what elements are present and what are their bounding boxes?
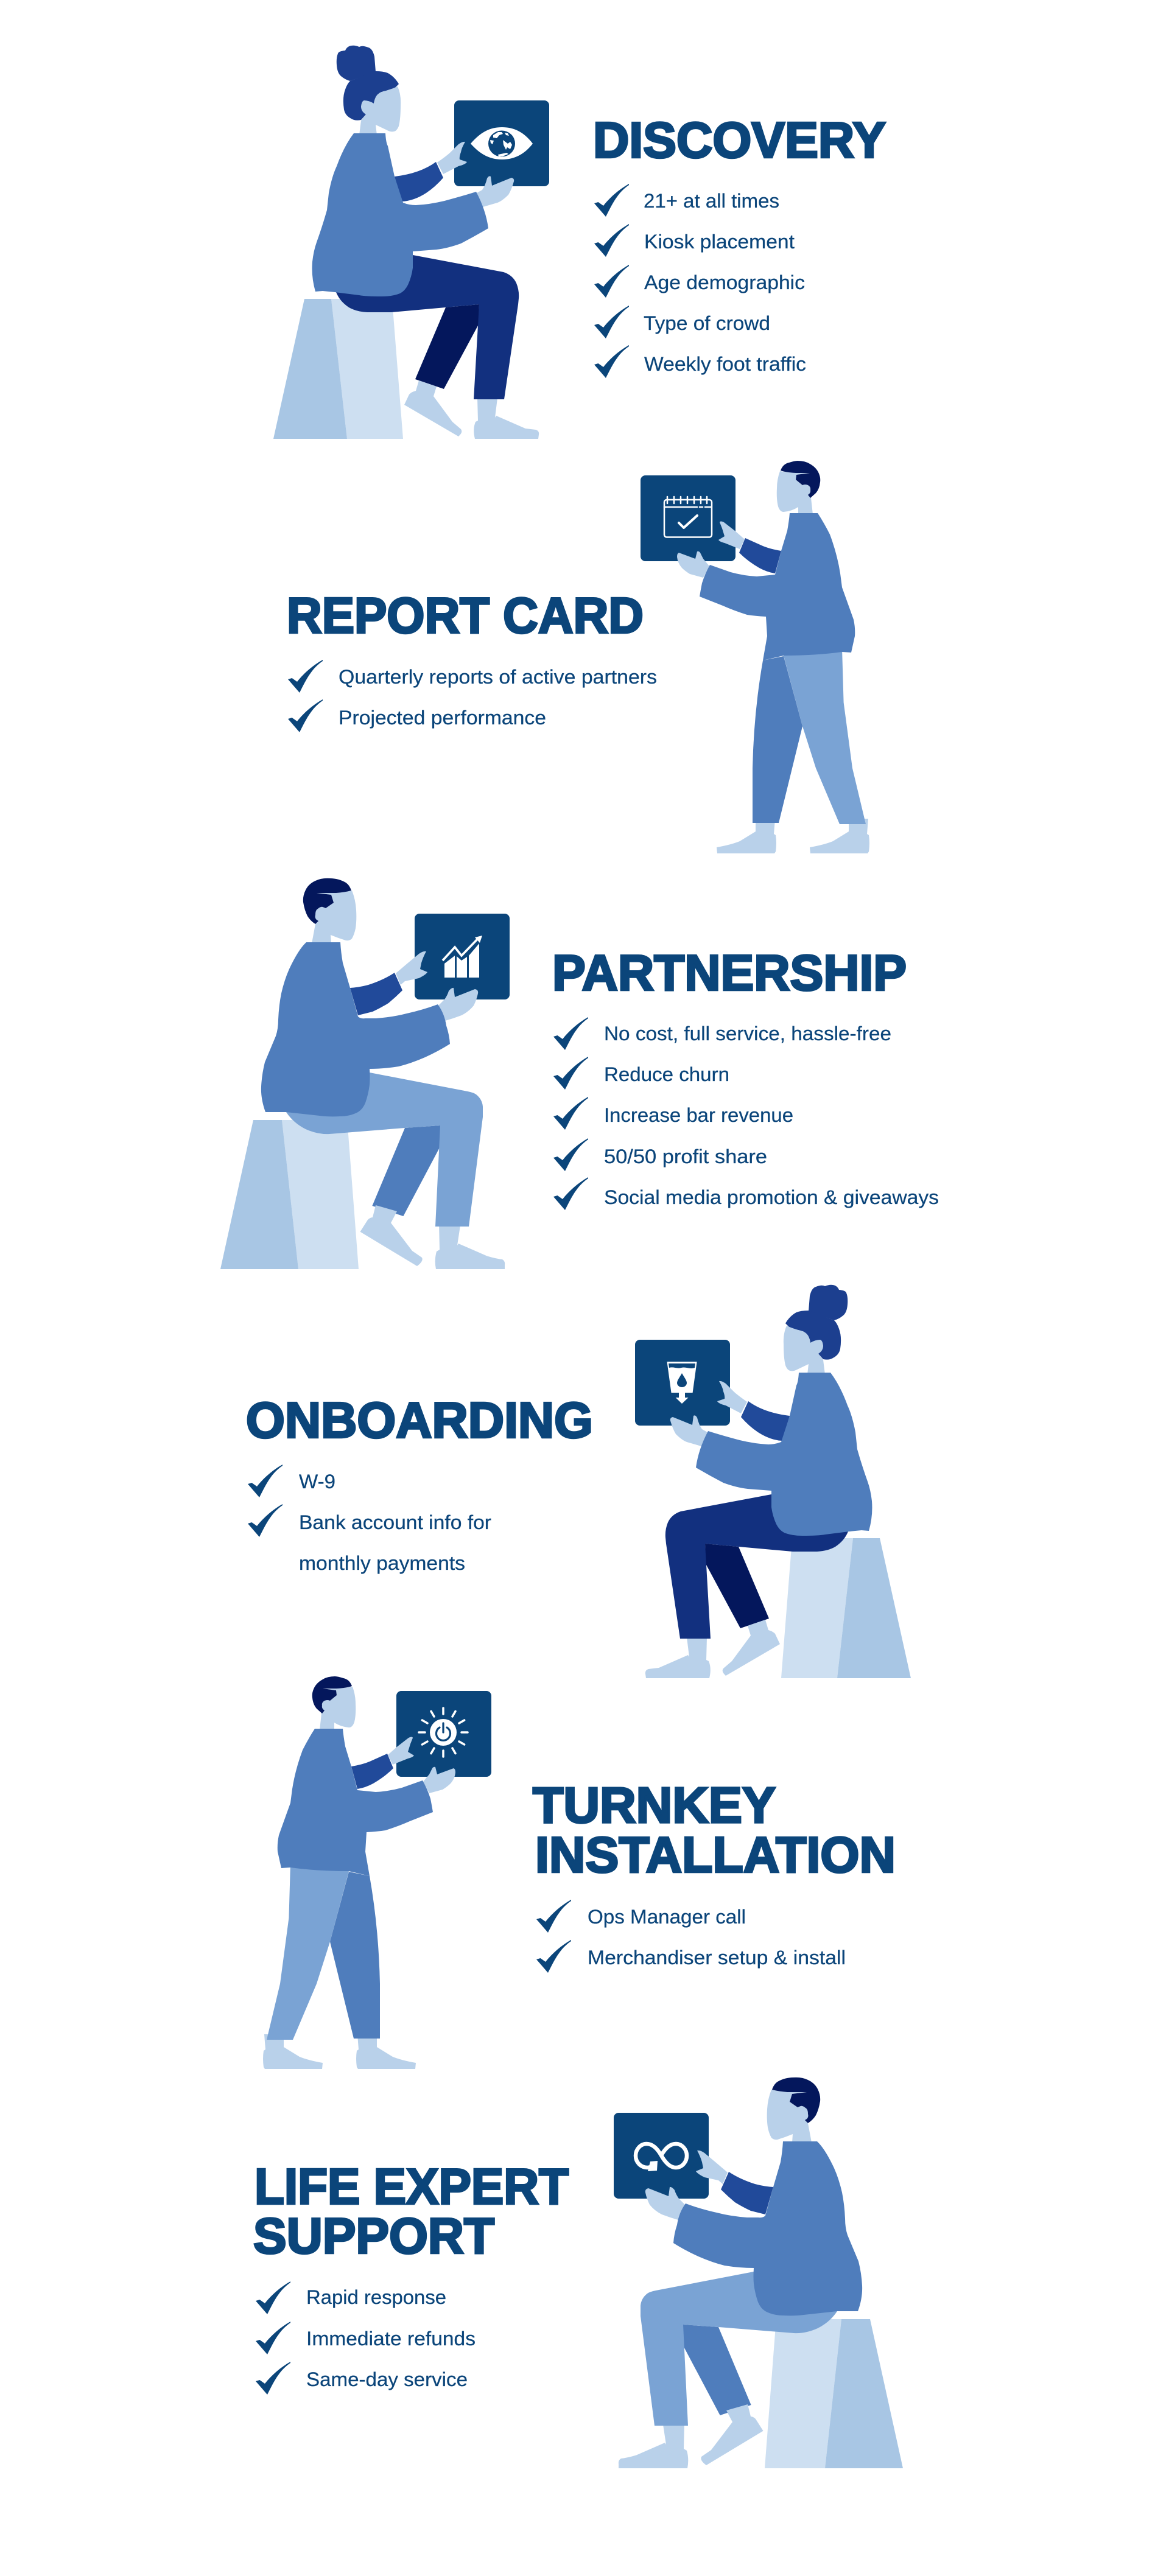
heading: life expert support [253,2158,569,2264]
tablet with infinity icon [614,2113,709,2199]
heading: turnkey installation [533,1777,896,1883]
heading: turnkey installation: INSTALLATION [535,1826,896,1883]
tablet with calendar icon [641,475,735,561]
tablet with glass icon [635,1340,730,1426]
heading: discovery: DISCOVERY [593,112,886,168]
panel: life expert support [253,2077,903,2468]
panel: discovery [273,46,886,439]
figure: standing man mirrored [263,1676,455,2069]
checklist: onboarding: Bank account info for [299,1511,491,1533]
panel: onboarding [246,1285,911,1678]
panel: turnkey installation [263,1676,896,2069]
checklist: report card: Quarterly reports of active partners [339,666,657,688]
figure: seated woman mirrored [645,1285,911,1678]
checklist: partnership [553,1017,939,1210]
checklist: discovery: Type of crowd [644,312,770,334]
checklist: turnkey installation [536,1900,846,1973]
heading: report card: REPORT CARD [287,587,644,644]
figure: seated man mirrored [619,2077,903,2468]
checklist: life expert support [256,2281,476,2395]
panel: partnership [220,878,939,1269]
checklist: partnership: Reduce churn [604,1063,729,1085]
checklist: report card [288,660,657,732]
checklist: partnership: No cost, full service, hassle-free [604,1023,891,1045]
heading: life expert support: LIFE EXPERT [255,2158,569,2214]
tablet with growth chart icon [415,914,510,999]
checklist: report card: Projected performance [339,707,546,729]
panel: report card [287,461,869,853]
tablet with eye icon [454,100,549,186]
figure: seated woman [273,46,539,439]
checklist: discovery: Kiosk placement [644,231,795,253]
checklist: life expert support: Immediate refunds [306,2328,476,2350]
checklist: discovery: Age demographic [644,271,805,293]
checklist: discovery: 21+ at all times [644,190,779,212]
checklist: life expert support: Same-day service [306,2368,468,2390]
checklist: onboarding: monthly payments [299,1552,465,1574]
checklist: partnership: 50/50 profit share [604,1146,767,1167]
checklist: turnkey installation: Merchandiser setup & install [588,1947,846,1969]
tablet with power icon [396,1691,491,1777]
checklist: life expert support: Rapid response [306,2286,446,2308]
heading: turnkey installation: TURNKEY [533,1777,776,1833]
checklist: discovery [594,184,806,378]
checklist: onboarding [248,1465,491,1574]
checklist: discovery: Weekly foot traffic [644,353,806,375]
checklist: partnership: Social media promotion & giveaways [604,1186,939,1208]
checklist: turnkey installation: Ops Manager call [588,1906,746,1928]
heading: partnership: PARTNERSHIP [552,945,907,1001]
heading: onboarding: ONBOARDING [246,1391,593,1449]
figure: seated man [220,878,505,1269]
heading: life expert support: SUPPORT [253,2207,494,2264]
checklist: onboarding: W-9 [299,1471,335,1493]
checklist: partnership: Increase bar revenue [604,1104,793,1126]
figure: standing man [677,461,869,853]
